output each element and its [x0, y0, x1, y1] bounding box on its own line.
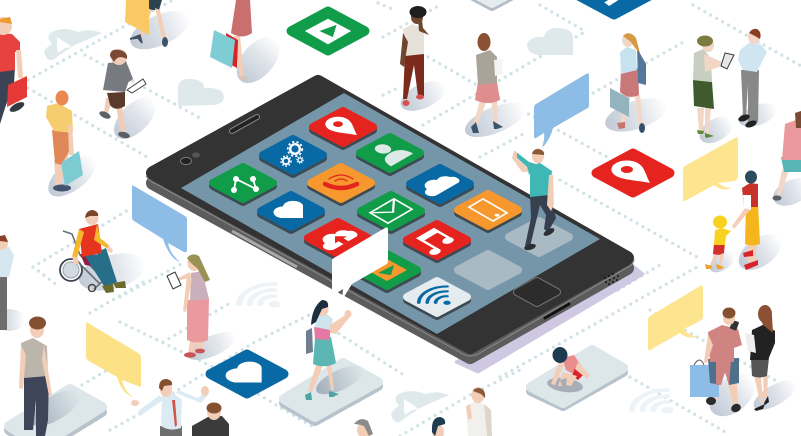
person: woman with green skirt and tablet	[693, 36, 737, 149]
charging slot	[545, 304, 569, 318]
icon: ghost wifi right	[625, 386, 687, 421]
person: man in wheelchair	[60, 210, 149, 297]
speech bubble: white on phone	[332, 227, 388, 300]
person: man with tie gesturing	[131, 379, 209, 436]
app icon: music	[407, 224, 467, 259]
person: man on left edge	[0, 235, 25, 331]
app icon: settings gears	[263, 139, 323, 174]
person: woman in black jacket	[745, 305, 801, 416]
phone side	[153, 92, 627, 357]
app icon: tablet	[458, 194, 518, 229]
person: woman with phone	[167, 254, 240, 366]
phone shadow	[456, 262, 643, 372]
icon: ghost cloud upload top left	[44, 29, 102, 60]
phone face	[153, 82, 627, 347]
icon: ghost wifi left	[232, 280, 294, 315]
app icon: telephone	[311, 167, 371, 202]
phone rim highlight	[146, 176, 634, 356]
app icon: location	[313, 111, 373, 146]
icon: ghost heart	[178, 79, 224, 106]
app icon: cloud upload	[308, 222, 368, 257]
person: man in black jacket	[192, 402, 229, 436]
platform: teal woman	[284, 360, 378, 421]
app icon: share network	[213, 167, 273, 202]
app icon: mail	[361, 195, 421, 230]
person: baby crawling	[546, 347, 590, 394]
person: man in yellow shirt with teal bag	[41, 90, 103, 204]
person: woman with dark hair on phone	[396, 6, 450, 117]
speech bubble: yellow upper right	[683, 137, 738, 201]
front sensor	[192, 152, 200, 158]
app icon: heart	[261, 195, 321, 230]
person: child with yellow hat	[705, 216, 738, 277]
app icon: video play	[357, 254, 417, 289]
speaker grille	[604, 273, 619, 285]
app icon: wifi	[407, 281, 467, 316]
speech bubble: yellow lower right	[648, 285, 703, 350]
empty app slot upper	[509, 221, 569, 253]
person: man with blue bag on phone	[690, 308, 763, 425]
person: grey haired woman bottom	[354, 419, 373, 436]
front camera	[180, 157, 192, 165]
earpiece speaker	[232, 117, 257, 131]
floating tile: heart blue	[210, 354, 284, 394]
person: woman with blue blouse and bags	[601, 33, 671, 138]
person: navy haired figure bottom	[432, 417, 445, 436]
phone screen	[181, 93, 600, 334]
person: man in red with bag	[0, 17, 27, 124]
app icon: cloud	[410, 168, 470, 203]
empty app slot lower	[458, 254, 518, 286]
person: woman in red dress with bags	[210, 0, 288, 91]
icon: ghost cloud upload bottom	[391, 391, 449, 422]
person: woman in teal skirt	[305, 300, 352, 400]
person: man in white shirt bottom	[466, 387, 492, 436]
speech bubble: blue top	[534, 73, 589, 148]
person: man beige shirt bottom left	[19, 316, 52, 436]
person: woman with yellow bag	[125, 0, 195, 57]
floating tile: blue top right	[577, 0, 651, 15]
side volume button	[232, 231, 297, 267]
speech bubble: yellow bottom left	[86, 322, 141, 397]
floating tile: play green	[291, 11, 365, 51]
floating tile: grey top	[462, 0, 522, 7]
icon: ghost cloud top right	[527, 28, 573, 55]
platform: bottom left	[9, 383, 102, 436]
phone	[146, 82, 643, 372]
home button	[517, 281, 557, 303]
person: mother with yellow skirt	[732, 170, 788, 277]
floating tile: location red	[596, 153, 670, 193]
person: woman far right	[769, 111, 801, 211]
person: woman with pink skirt and folder	[460, 33, 530, 144]
person: man in teal shirt on phone	[512, 148, 556, 251]
person: man in grey trousers	[736, 29, 780, 131]
platform: baby	[531, 350, 623, 406]
person: woman in grey suit with tablet	[98, 49, 163, 146]
app icon: contact person	[360, 137, 420, 172]
speech bubble: blue left	[132, 185, 187, 262]
earpiece slot	[232, 117, 257, 131]
